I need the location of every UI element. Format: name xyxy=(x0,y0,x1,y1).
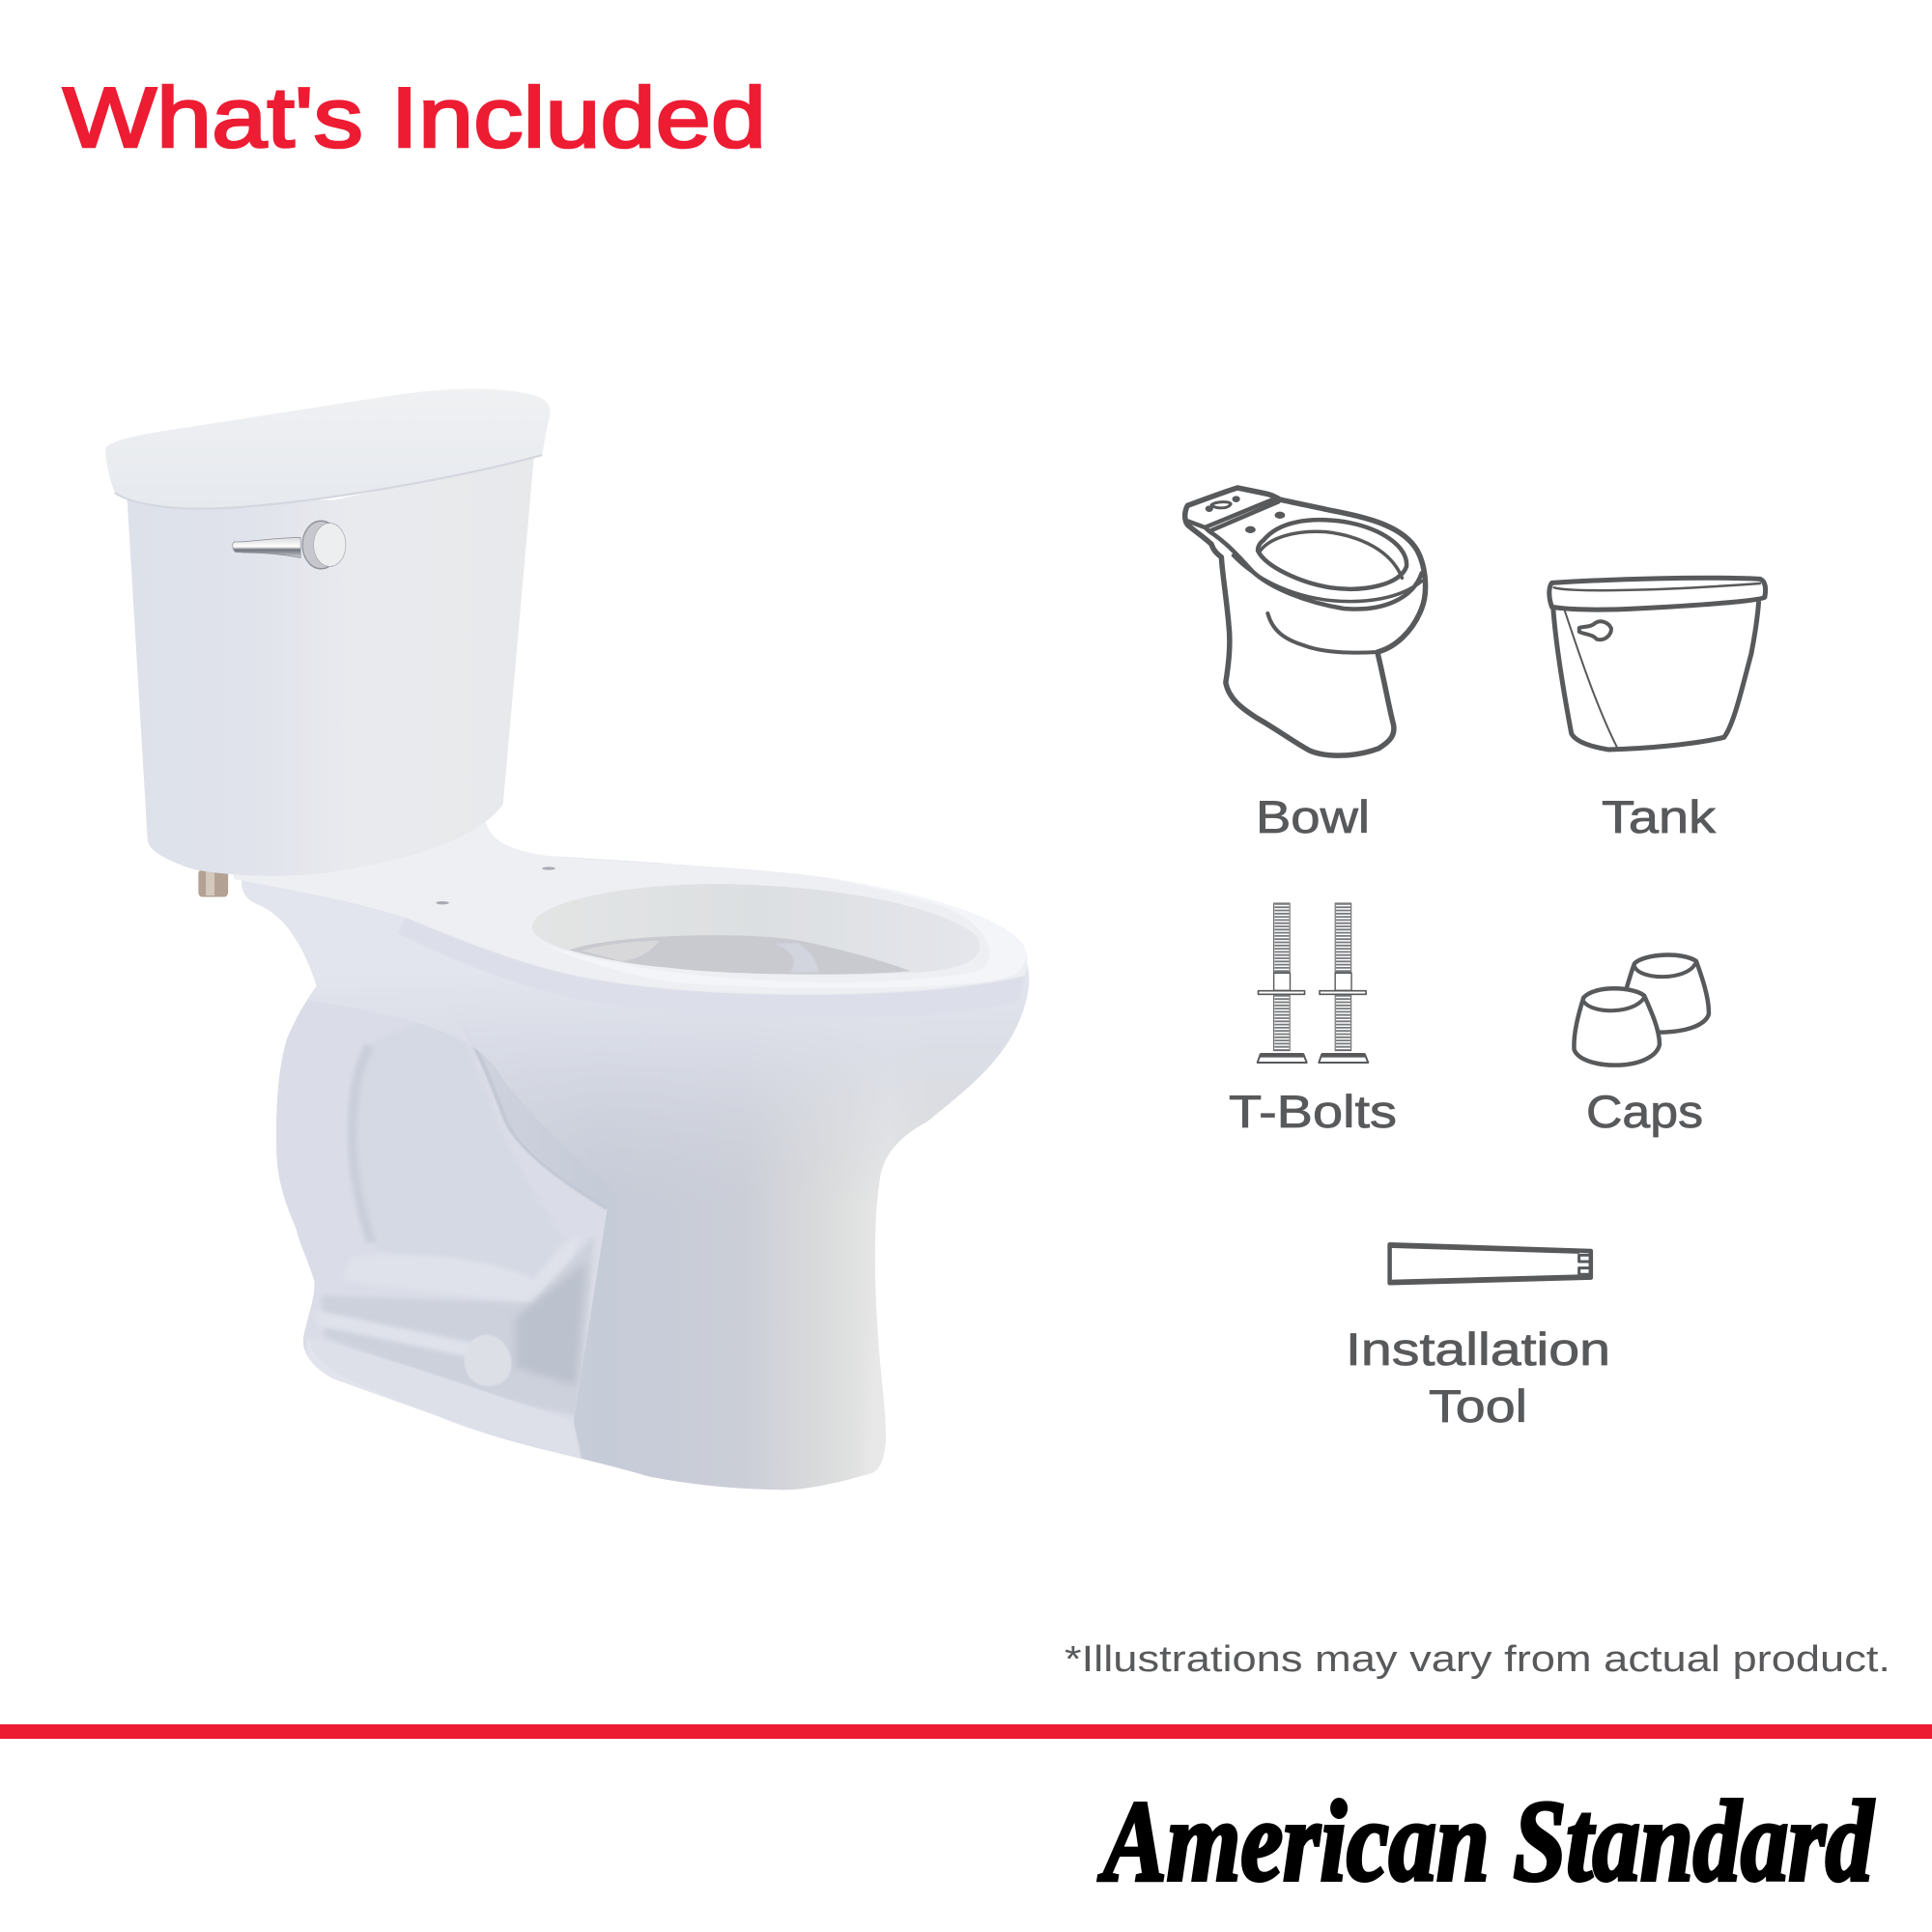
blue rim edge xyxy=(541,877,1026,988)
label: Bowl: Bowl xyxy=(1256,791,1370,842)
label: Installation Tool xyxy=(1346,1323,1610,1432)
bolt left xyxy=(1258,903,1307,1063)
seat bolt holes xyxy=(542,867,555,870)
trap recess xyxy=(355,1009,565,1280)
footnote: *Illustrations may vary from actual product. xyxy=(1065,1639,1890,1680)
rim and bowl xyxy=(217,792,1028,1018)
pedestal front xyxy=(585,1460,842,1490)
right highlight xyxy=(860,1295,927,1522)
upper fade xyxy=(301,858,1029,1130)
trap way xyxy=(276,1001,607,1422)
label: Caps: Caps xyxy=(1586,1086,1703,1137)
arch shadow xyxy=(353,1046,372,1242)
deck xyxy=(217,792,1028,995)
base band xyxy=(376,1359,582,1459)
icon: bowl xyxy=(1185,488,1426,755)
water xyxy=(569,935,910,975)
bowl inside xyxy=(532,884,980,975)
toilet photo xyxy=(105,388,1030,1490)
flush handle xyxy=(233,521,346,569)
icon: installation tool xyxy=(1390,1244,1591,1283)
bolt cap xyxy=(465,1335,511,1386)
icon: tank xyxy=(1549,578,1766,750)
shelf xyxy=(427,1258,517,1276)
icon: caps xyxy=(1574,955,1709,1065)
tank xyxy=(128,456,534,876)
tank group xyxy=(105,389,550,897)
red divider xyxy=(0,1724,1932,1739)
base highlight xyxy=(296,1337,692,1507)
bolt right xyxy=(1319,903,1368,1063)
label: Installation Tool: Tool xyxy=(1429,1380,1527,1432)
lower recess shadow xyxy=(321,1235,595,1416)
body base fill xyxy=(242,857,1026,1490)
trap edge shadow xyxy=(471,1047,607,1209)
icon: t-bolts xyxy=(1258,903,1368,1063)
toilet bowl body xyxy=(242,856,1030,1490)
rim underside shade xyxy=(398,918,1025,1018)
title: What's Included xyxy=(63,70,766,165)
label: T-Bolts: T-Bolts xyxy=(1229,1086,1397,1137)
label: Installation Tool: Installation xyxy=(1346,1323,1610,1375)
supply stub xyxy=(198,869,228,896)
label: Tank: Tank xyxy=(1602,791,1717,842)
tank lid xyxy=(105,389,550,509)
